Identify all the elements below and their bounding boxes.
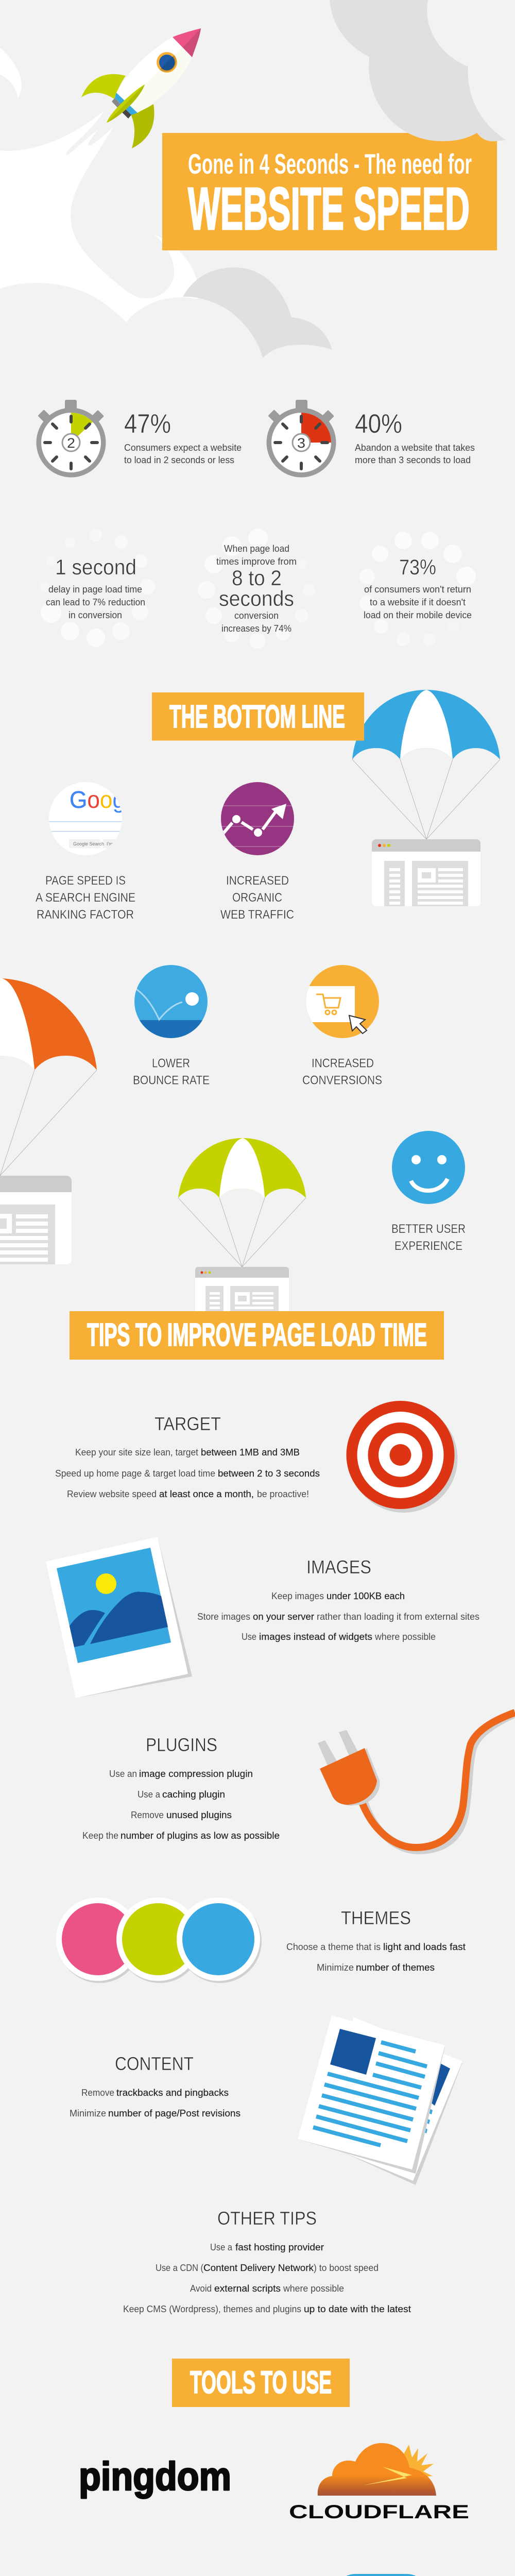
stat 47%	[124, 409, 242, 465]
tip: themes: number of themes	[356, 1962, 435, 1973]
stat: 73%: to a website if it doesn't	[370, 597, 466, 607]
tip: other tips: Use a	[210, 2242, 233, 2252]
stat: 73%	[359, 532, 476, 646]
label: increased conversions	[302, 1056, 382, 1087]
gray cloud top right	[330, 0, 506, 141]
label: page speed: A SEARCH ENGINE	[36, 891, 135, 905]
tip: images	[197, 1556, 479, 1642]
logo: cloudflare	[289, 2443, 469, 2522]
label: lower bounce rate: LOWER	[152, 1056, 190, 1071]
tip: plugins: Keep the	[82, 1831, 118, 1841]
tip: content	[70, 2053, 241, 2119]
loader ring right	[359, 532, 476, 646]
tip: plugins: image compression plugin	[139, 1769, 253, 1779]
icon: photo	[46, 1537, 192, 1698]
tip: target: between 2 to 3 seconds	[218, 1468, 320, 1479]
parachute orange with browser	[0, 978, 97, 1264]
tip: other tips	[123, 2208, 411, 2314]
tip: content: Minimize	[70, 2108, 106, 2119]
stat: 8 to 2 seconds: 8 to 2	[232, 566, 282, 590]
heading: the bottom line	[152, 692, 364, 741]
tip: images: IMAGES	[306, 1556, 371, 1578]
stopwatch 2 seconds	[36, 400, 106, 477]
label: increased conversions: CONVERSIONS	[302, 1074, 382, 1087]
tip: target	[55, 1413, 320, 1499]
stat: 1 second: delay in page load time	[48, 584, 142, 595]
tip: images: under 100KB each	[327, 1591, 405, 1601]
icon: organic traffic chart	[221, 782, 294, 855]
label: increased conversions: INCREASED	[312, 1056, 374, 1071]
icon: plug and cord	[318, 1713, 515, 1851]
parachute green with browser	[178, 1138, 306, 1319]
gray cloud bottom	[183, 267, 332, 358]
tip: other tips: where possible	[283, 2283, 344, 2294]
icon: theme circles	[56, 1897, 262, 1983]
tip: plugins: Remove	[131, 1810, 164, 1820]
tip: images: images instead of widgets	[259, 1632, 372, 1642]
tip: images: Use	[242, 1632, 256, 1642]
tip: plugins: PLUGINS	[146, 1734, 217, 1755]
stat: 8 to 2 seconds: times improve from	[216, 556, 297, 567]
stat 40%: Abandon a website that takes	[355, 443, 475, 453]
label: better user experience: BETTER USER	[391, 1222, 466, 1236]
logo: cloudflare: CLOUDFLARE	[289, 2501, 469, 2522]
label: organic traffic	[220, 874, 294, 922]
stat: 8 to 2 seconds: conversion	[234, 611, 279, 621]
icon: google search	[49, 782, 125, 855]
tip: themes: Minimize	[317, 1962, 354, 1973]
label: organic traffic: INCREASED	[226, 874, 289, 888]
tip: images: Keep images	[271, 1591, 324, 1601]
stopwatch 2 seconds: 2	[67, 435, 75, 451]
label: organic traffic: ORGANIC	[232, 891, 282, 905]
tip: other tips: up to date with the latest	[304, 2304, 411, 2314]
tip: target: TARGET	[154, 1413, 221, 1434]
stopwatch 3 seconds	[267, 400, 336, 477]
heading: tools to use: TOOLS TO USE	[190, 2365, 332, 2400]
stat: 1 second	[39, 529, 155, 647]
label: page speed: RANKING FACTOR	[37, 908, 134, 922]
tip: themes: light and loads fast	[383, 1942, 466, 1952]
tip: other tips: Use a CDN (	[156, 2263, 203, 2273]
tip: content: number of page/Post revisions	[108, 2108, 241, 2119]
label: page speed	[36, 874, 135, 922]
tip: plugins: Use a	[138, 1789, 161, 1800]
stat: 8 to 2 seconds: When page load	[224, 544, 289, 554]
tip: other tips: OTHER TIPS	[217, 2208, 317, 2229]
tip: other tips: ) to boost speed	[314, 2263, 379, 2273]
tip: target: be proactive!	[257, 1489, 309, 1499]
smoke cloud: white top left	[0, 47, 22, 98]
tip: target: between 1MB and 3MB	[201, 1447, 300, 1458]
stat 40%: more than 3 seconds to load	[355, 455, 471, 465]
tip: images: on your server	[253, 1612, 314, 1622]
stat 40%	[355, 409, 475, 465]
stat: 1 second: can lead to 7% reduction	[46, 597, 145, 607]
label: lower bounce rate: BOUNCE RATE	[133, 1074, 210, 1087]
heading: tips	[70, 1311, 444, 1360]
stat: 73%: 73%	[399, 555, 436, 579]
stat: 8 to 2 seconds	[198, 529, 315, 649]
label: page speed: PAGE SPEED IS	[45, 874, 126, 888]
stat: 1 second: in conversion	[68, 610, 122, 620]
loader ring left	[39, 529, 155, 647]
stat 47%: 47%	[124, 409, 171, 439]
tip: themes	[286, 1907, 466, 1973]
icon: google search: Goog	[70, 786, 125, 813]
tip: content: CONTENT	[115, 2053, 194, 2074]
stopwatch 3 seconds: 3	[297, 435, 305, 451]
tip: target: at least once a month,	[159, 1489, 254, 1499]
tip: images: Store images	[197, 1612, 250, 1622]
title panel	[162, 133, 497, 250]
stat: 8 to 2 seconds: seconds	[219, 586, 294, 611]
tip: plugins	[82, 1734, 280, 1841]
tip: other tips: fast hosting provider	[235, 2242, 324, 2252]
tip: target: Speed up home page & target load time	[55, 1468, 215, 1479]
label: better user experience: EXPERIENCE	[394, 1239, 462, 1253]
tip: target: Review website speed	[67, 1489, 157, 1499]
icon: bounce rate	[134, 965, 208, 1041]
tip: content: trackbacks and pingbacks	[116, 2088, 229, 2098]
stat 40%: 40%	[355, 409, 402, 439]
stat: 73%: of consumers won't return	[364, 584, 471, 595]
tip: themes: THEMES	[341, 1907, 411, 1928]
icon: google search: I'm	[107, 841, 113, 846]
stat: 8 to 2 seconds: increases by 74%	[221, 623, 291, 634]
loader ring middle	[198, 529, 315, 649]
icon: smiley	[392, 1131, 465, 1204]
tip: other tips: Avoid	[190, 2283, 212, 2294]
tip: plugins: number of plugins as low as possible	[121, 1831, 280, 1841]
stat 47%: Consumers expect a website	[124, 443, 242, 453]
tip: plugins: unused plugins	[166, 1810, 232, 1820]
tip: other tips: Keep CMS (Wordpress), themes and plugins	[123, 2304, 301, 2314]
stat 47%: to load in 2 seconds or less	[124, 455, 234, 465]
tip: images: rather than loading it from external sites	[317, 1612, 479, 1622]
tip: other tips: external scripts	[214, 2283, 281, 2294]
logo: gt metrix	[335, 2574, 427, 2576]
tip: plugins: caching plugin	[162, 1789, 225, 1800]
stat: 73%: load on their mobile device	[364, 610, 472, 620]
tip: themes: Choose a theme that is	[286, 1942, 381, 1952]
icon: shopping cart conversions	[306, 965, 379, 1038]
tip: images: where possible	[374, 1632, 436, 1642]
icon: target	[346, 1401, 457, 1513]
tip: content: Remove	[81, 2088, 114, 2098]
label: lower bounce rate	[133, 1056, 210, 1087]
tip: plugins: Use an	[109, 1769, 137, 1779]
heading: tools to use	[172, 2359, 350, 2407]
label: better user experience	[391, 1222, 466, 1253]
heading: the bottom line: THE BOTTOM LINE	[169, 699, 345, 735]
smoke cloud: white exhaust	[0, 110, 197, 323]
icon: documents	[298, 2015, 462, 2185]
tip: other tips: Content Delivery Network	[203, 2263, 314, 2273]
parachute blue with browser	[352, 690, 500, 906]
label: organic traffic: WEB TRAFFIC	[220, 908, 294, 922]
tip: target: Keep your site size lean, target	[75, 1447, 198, 1458]
icon: rocket	[81, 28, 201, 148]
stat: 1 second: 1 second	[55, 555, 136, 579]
icon: google search: Google Search	[73, 841, 104, 846]
logo: pingdom: pingdom	[79, 2454, 231, 2499]
